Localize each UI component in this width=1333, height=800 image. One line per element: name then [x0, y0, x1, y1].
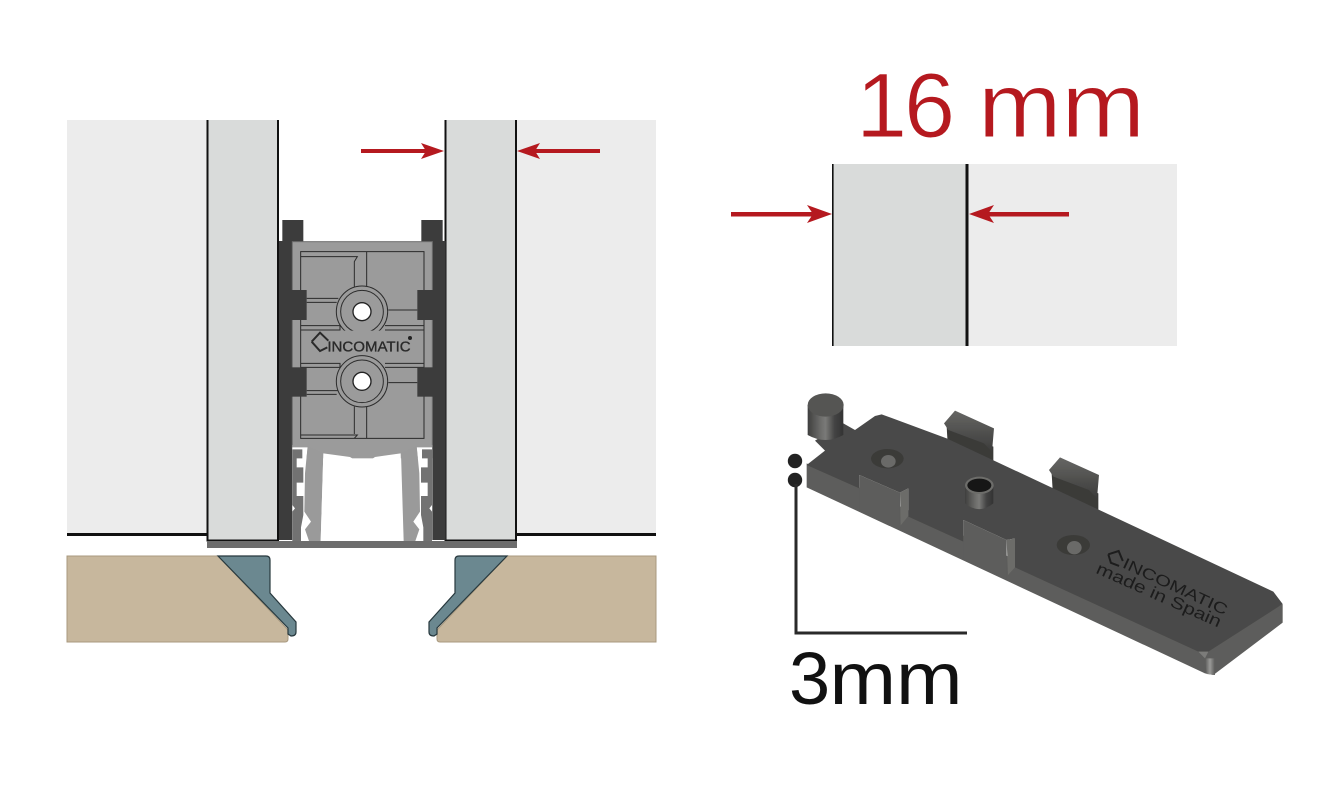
left diagram: door cross-section: [67, 120, 656, 642]
right door leaf: [446, 120, 516, 540]
hollow cylinder: [965, 477, 994, 509]
right wall base line: [516, 533, 656, 536]
side bars: [279, 220, 446, 540]
plate top face: [807, 414, 1283, 652]
arrow: left panel left: [361, 143, 444, 159]
left door leaf: [208, 120, 278, 540]
heading: 16 mm: 1: [856, 55, 907, 157]
right wall panel: [516, 120, 656, 535]
logo band: [302, 331, 422, 356]
dimension label: mm: [830, 638, 963, 720]
light wall: [967, 164, 1177, 346]
lower screw hole: [336, 356, 388, 407]
left edge: [832, 164, 834, 346]
detail: panel thickness: [731, 164, 1177, 346]
spring clip 1 lip: [944, 411, 994, 452]
spring clip 1 base: [947, 427, 993, 475]
dimension lines: [796, 484, 967, 633]
right blue gasket: [429, 556, 507, 636]
door section: [833, 164, 967, 346]
mechanism: incomatic sliding guide: [279, 220, 446, 541]
arrow: left panel right: [517, 143, 600, 159]
dimension label: 3: [789, 637, 830, 720]
right floor board: [437, 556, 656, 642]
engraved text: made in Spain: [1093, 559, 1224, 631]
left profile leg: [292, 446, 323, 541]
body lower strip: [292, 445, 432, 458]
left wall panel: [67, 120, 208, 535]
grey body: [292, 242, 432, 448]
engraved logo: INCOMATIC: [1120, 555, 1230, 619]
spring clip 2 lip: [1049, 457, 1099, 498]
bottom rail: [207, 541, 517, 548]
countersunk holes: [871, 449, 1090, 555]
right profile leg: [401, 446, 432, 541]
arrow: detail right: [969, 205, 1069, 223]
engraved logo: [1104, 548, 1230, 619]
plate body: [807, 393, 1283, 675]
product render: guide plate: [807, 393, 1283, 675]
heading: 16 mm: mm: [978, 55, 1145, 157]
spring clip 2 base: [1052, 473, 1098, 522]
pin: [808, 393, 844, 440]
left wall base line: [67, 533, 208, 536]
logo band: INCOMATIC: [327, 339, 411, 356]
heading: 16 mm: [856, 55, 1145, 157]
left blue gasket: [218, 556, 296, 636]
right edge: [966, 164, 968, 346]
dimension dots: [788, 454, 802, 487]
corner detail: [1198, 652, 1208, 658]
upper screw hole: [336, 286, 388, 337]
arrow: detail left: [731, 205, 832, 223]
heading: 16 mm: 6: [904, 55, 955, 157]
dimension marker: 3mm: [788, 454, 967, 720]
plate side faces: [807, 463, 1283, 675]
left floor board: [67, 556, 288, 642]
ribs: [301, 252, 424, 438]
clamp blocks: [288, 290, 436, 397]
central opening: [321, 453, 403, 541]
notch faces: [859, 475, 1015, 580]
